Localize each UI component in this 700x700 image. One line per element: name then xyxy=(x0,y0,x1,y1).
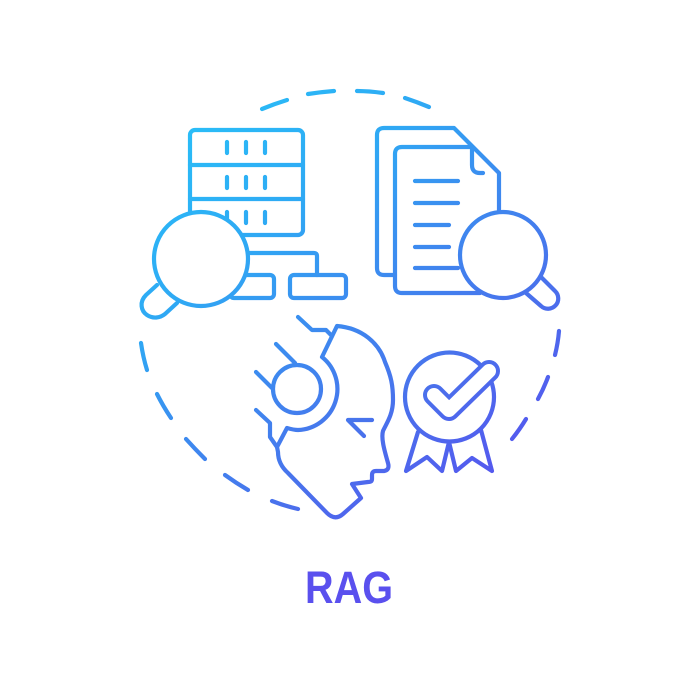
hierarchy boxes and connector xyxy=(230,253,346,298)
back page xyxy=(377,128,499,275)
ribbons xyxy=(406,430,492,471)
head outline xyxy=(277,326,393,517)
front page xyxy=(395,147,480,293)
title: RAG xyxy=(305,562,393,613)
badge circle xyxy=(405,352,494,442)
magnifier xyxy=(460,212,558,309)
icon: database server with magnifier xyxy=(142,130,346,318)
server rack xyxy=(190,130,303,235)
icon: AI robot head with headset xyxy=(256,317,393,517)
circuit wires xyxy=(256,317,332,447)
icon: quality badge with check mark xyxy=(405,352,494,471)
text lines xyxy=(415,181,458,268)
check mark xyxy=(434,371,489,410)
headset ear circle xyxy=(273,365,321,413)
eye xyxy=(348,420,372,436)
magnifier xyxy=(142,212,248,318)
icon: documents with magnifier xyxy=(377,128,558,309)
dashed circle ring xyxy=(141,91,559,509)
page fold xyxy=(472,147,483,173)
